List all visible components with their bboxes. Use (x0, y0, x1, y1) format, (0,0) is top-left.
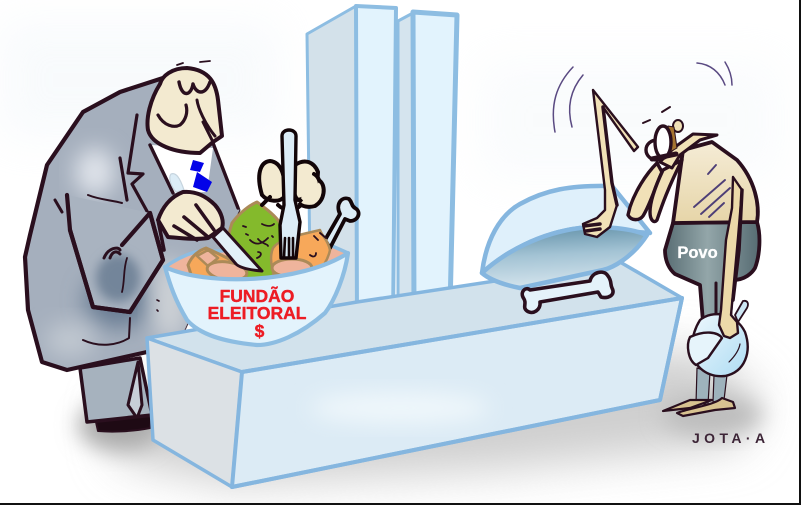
trousers and shoes (80, 358, 152, 432)
bowl label: $ (255, 321, 265, 341)
shirt torso (673, 142, 758, 223)
head (628, 120, 717, 222)
legs and shoes (663, 368, 735, 416)
bowl of food (165, 130, 359, 345)
knife and carving hand (158, 192, 262, 271)
bowl label: ELEITORAL (208, 303, 307, 323)
bowl body (165, 253, 348, 345)
collar lines (150, 143, 238, 208)
green food (228, 202, 281, 282)
bone on building (522, 272, 613, 312)
raised arm and hand (583, 90, 638, 237)
building towers (307, 6, 457, 325)
left orange food (188, 248, 248, 284)
hat (688, 301, 748, 376)
suit jacket (25, 78, 240, 370)
knife handle (170, 174, 184, 192)
motion lines (553, 62, 732, 132)
trousers (665, 222, 759, 322)
bowl label (208, 285, 307, 341)
head (148, 61, 222, 153)
trousers label: Povo (677, 244, 718, 262)
hanging arm and hand (719, 177, 742, 338)
signature: JOTA·A (692, 430, 769, 446)
shirt shading lines (694, 165, 730, 217)
congress building base (147, 262, 682, 487)
hand holding fork (259, 130, 324, 258)
chicken leg (271, 198, 359, 280)
bowl back rim (165, 246, 348, 290)
common man (583, 90, 759, 416)
open dome (482, 186, 650, 288)
shirt front (150, 145, 213, 193)
bowl label: FUNDÃO (220, 285, 294, 306)
necktie (190, 160, 212, 192)
politician body (25, 61, 240, 432)
